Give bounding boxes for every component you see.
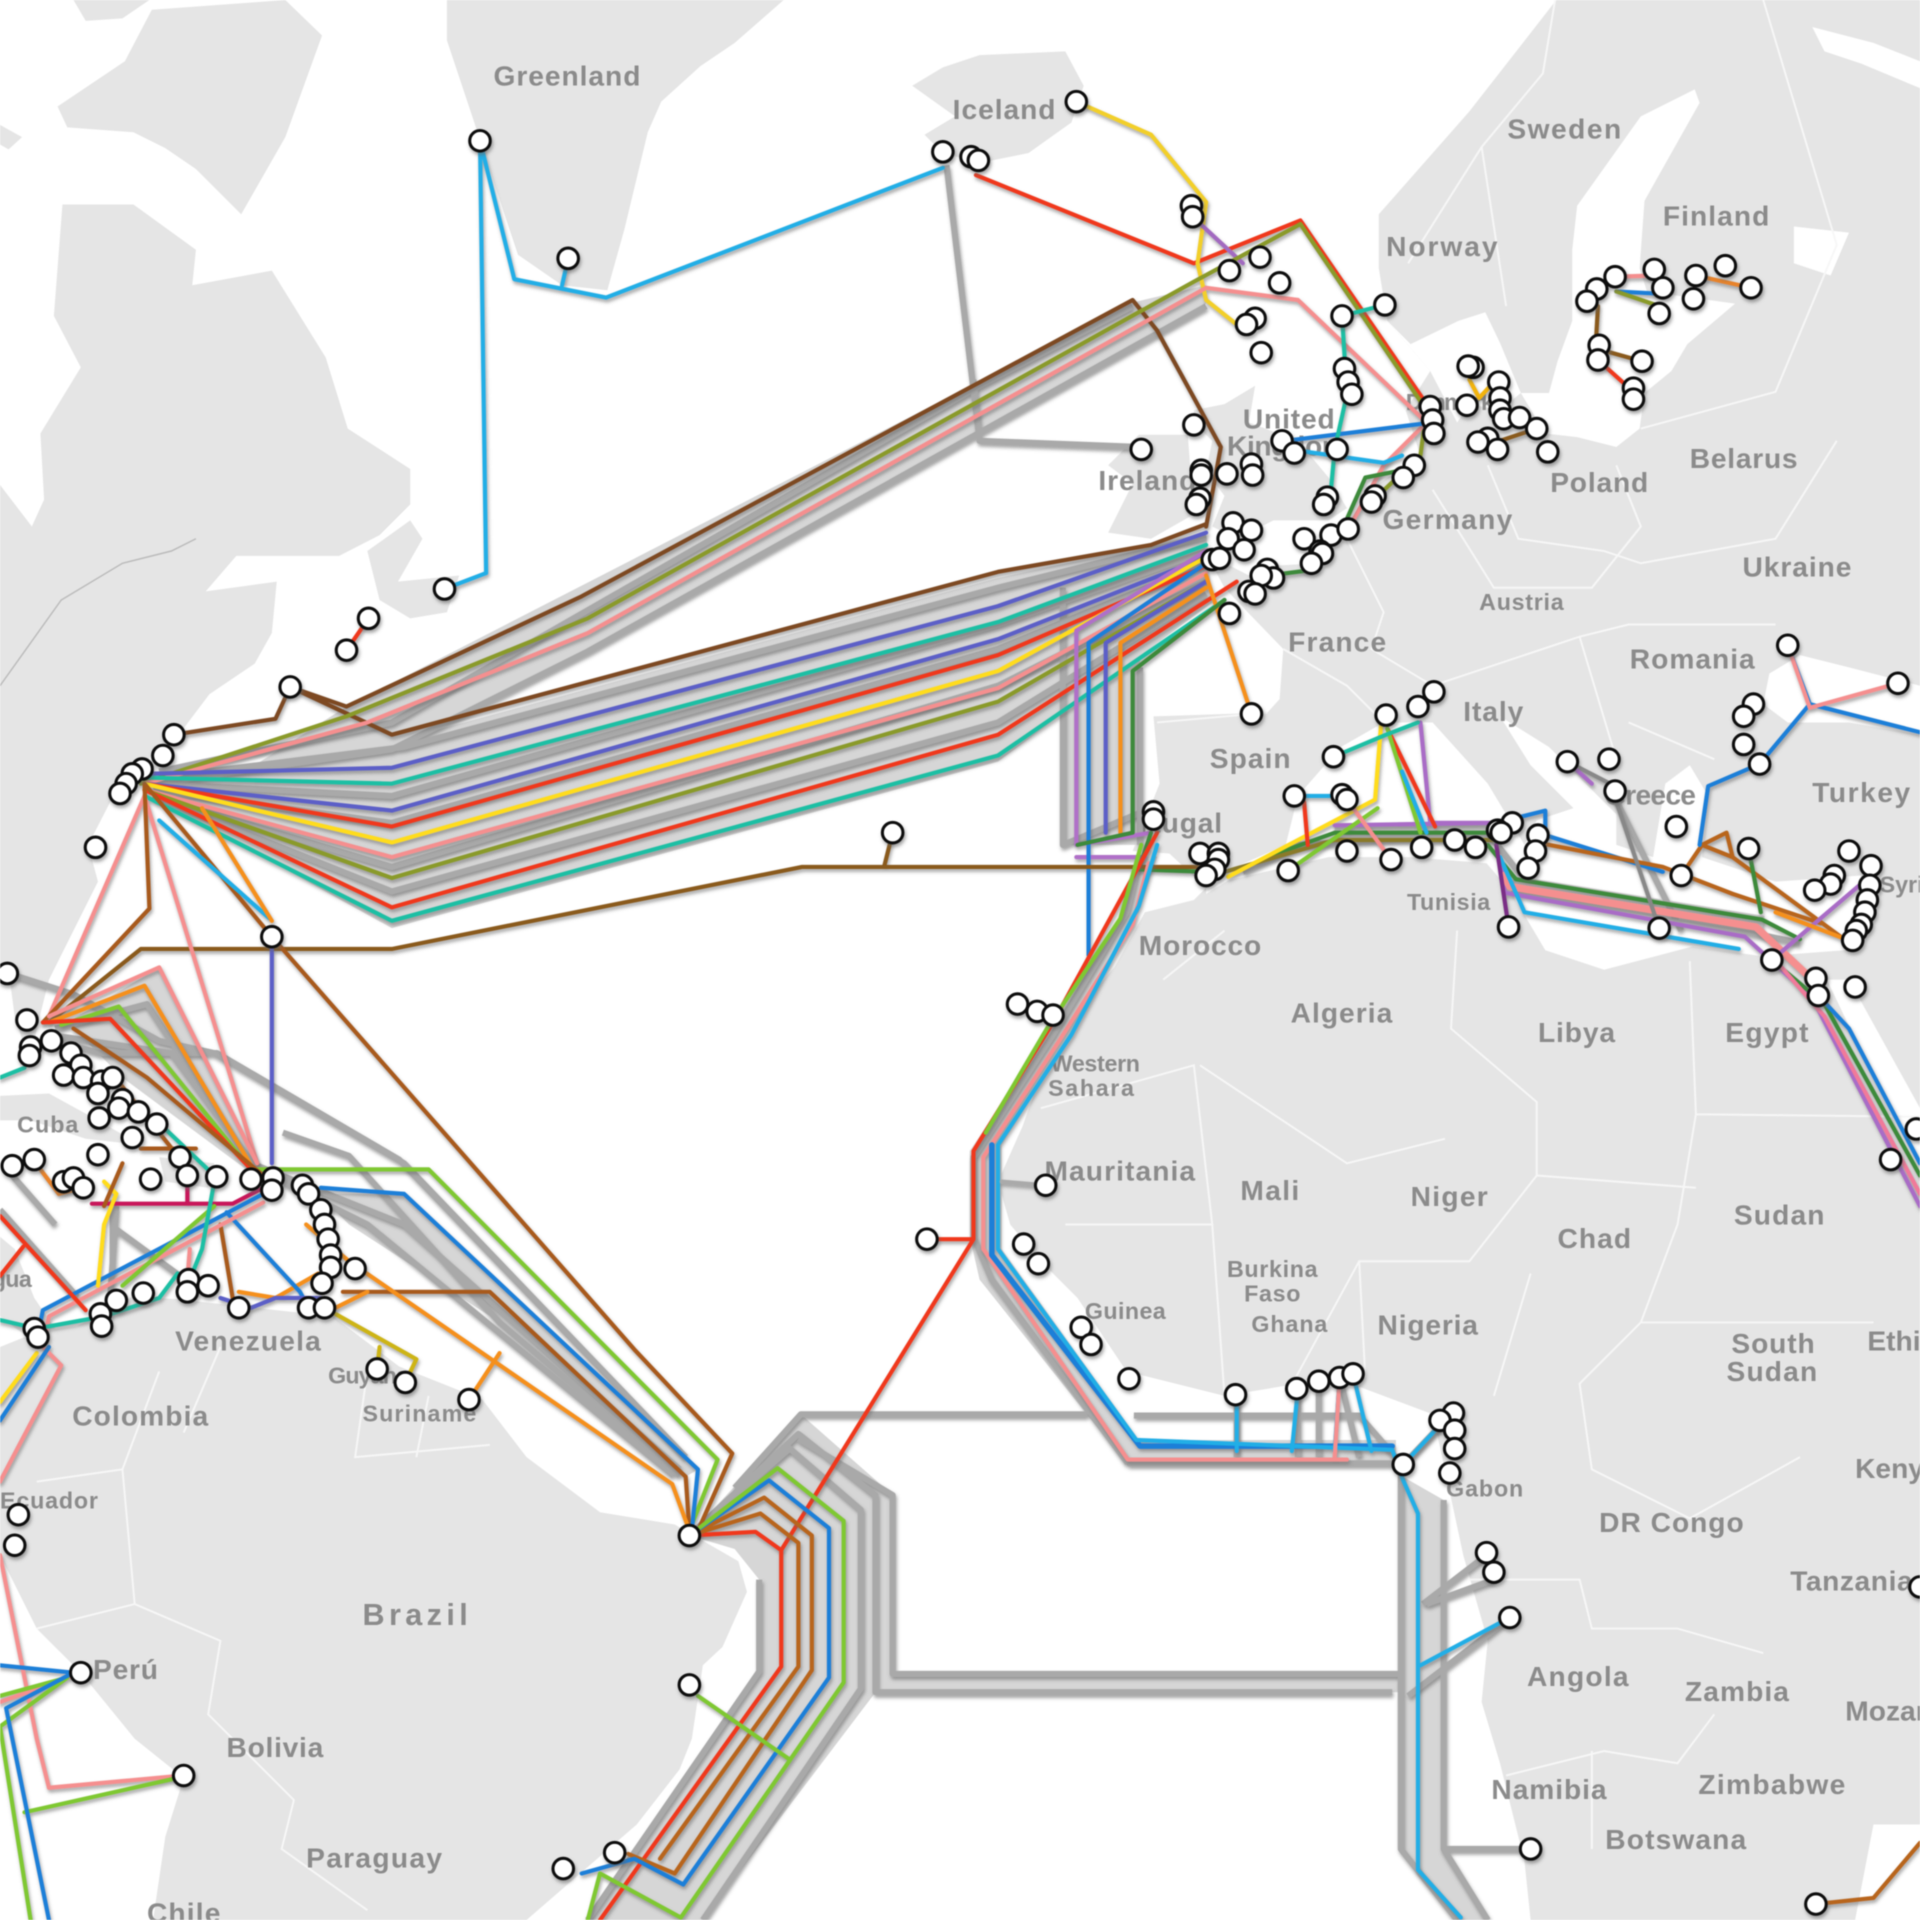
label: Germany: Germany xyxy=(1382,504,1513,535)
cable: pink trunk xyxy=(1504,876,1812,980)
label: Austria: Austria xyxy=(1479,589,1565,615)
label: Iceland: Iceland xyxy=(953,94,1056,125)
land: Hispaniola xyxy=(159,1157,214,1188)
label: Niger: Niger xyxy=(1411,1181,1488,1212)
label: Venezuela: Venezuela xyxy=(175,1326,321,1357)
label: Zimbabwe: Zimbabwe xyxy=(1698,1769,1845,1800)
label: Nigeria: Nigeria xyxy=(1378,1310,1478,1341)
cable: brown diagonal xyxy=(43,784,732,1531)
label: Denmark: Denmark xyxy=(1406,389,1494,415)
cable: pink Ghana xyxy=(1335,1378,1340,1457)
shading: South Atlantic link xyxy=(876,1674,1400,1692)
cable: Pacific pink xyxy=(0,1555,184,1788)
cable: Pacific blue xyxy=(0,1665,73,1920)
sea: lake Ladoga xyxy=(1794,227,1849,276)
cables: Caribbean xyxy=(0,967,718,1531)
cable: yellow Caribbean xyxy=(0,1182,116,1402)
cable: gray stub Mauritania xyxy=(1002,1182,1046,1185)
cable: channel xyxy=(1267,569,1316,576)
cable: Faroe yellow xyxy=(1076,102,1237,324)
label: Kingdom: Kingdom xyxy=(1227,431,1347,462)
cable: pink Algeria xyxy=(1347,800,1391,860)
label: Morocco: Morocco xyxy=(1139,930,1261,961)
cable: cyan trunk xyxy=(1500,857,1739,949)
cable: cyan branches xyxy=(1237,1374,1510,1665)
sea: Skagerrak xyxy=(1387,312,1521,422)
label: Angola: Angola xyxy=(1527,1661,1629,1692)
cable: cyan Italy xyxy=(1294,771,1427,833)
label: Namibia: Namibia xyxy=(1491,1774,1607,1805)
landing points: Caribbean xyxy=(0,963,365,1347)
label: Gabon: Gabon xyxy=(1446,1475,1523,1501)
label: Romania: Romania xyxy=(1630,644,1755,675)
label: Egypt: Egypt xyxy=(1725,1017,1809,1048)
cable: orange to Bermuda xyxy=(202,808,272,921)
label: Burkina: Burkina xyxy=(1227,1256,1319,1282)
label: Italy: Italy xyxy=(1463,696,1524,727)
cable: pink north xyxy=(144,288,1427,784)
landing points: Northern Europe xyxy=(1181,195,1761,462)
cable: yellow xyxy=(144,557,1206,842)
cable: green North Sea xyxy=(1341,471,1396,533)
cable: gray Greece xyxy=(1567,762,1659,928)
land: Canada and eastern USA xyxy=(0,204,410,1065)
cable: Bermuda slate xyxy=(270,943,274,1163)
shading: Caribbean fan xyxy=(67,967,260,1173)
cable: olive 2 xyxy=(144,582,1206,878)
land: Cuba xyxy=(0,1093,141,1145)
cable: Iceland-Scotland xyxy=(347,175,1427,650)
land: South America xyxy=(0,1297,747,1920)
cable: red xyxy=(144,566,1206,827)
cable: orange Finland xyxy=(1696,276,1751,288)
cable: red 2 xyxy=(144,582,1237,907)
label: Brazil: Brazil xyxy=(362,1598,468,1632)
cable: green Italy xyxy=(1288,729,1420,871)
label: Guinea: Guinea xyxy=(1085,1298,1167,1324)
cable: North Sea cyan xyxy=(1298,451,1402,463)
shading: Southwest Africa bundle xyxy=(1401,1476,1488,1920)
label: Ecuador: Ecuador xyxy=(0,1488,98,1514)
cable: red West Africa xyxy=(781,833,1157,1550)
label: Belarus: Belarus xyxy=(1690,443,1798,474)
cable: Azores brown xyxy=(49,833,1206,1022)
cable: pink West Africa xyxy=(983,863,1347,1460)
cable: blue Sicily-Greece xyxy=(1496,811,1663,872)
label: Suriname: Suriname xyxy=(362,1401,476,1427)
shading: Caribbean to Brazil bundle xyxy=(318,1194,698,1477)
shading: North Atlantic upper bundle xyxy=(245,285,1206,771)
land: Europe, Africa, Asia xyxy=(998,0,1920,1920)
label: Spain: Spain xyxy=(1210,743,1291,774)
cable: slate vertical xyxy=(1106,582,1206,833)
cables: West Africa xyxy=(781,833,1510,1918)
cable: orange fan xyxy=(49,986,253,1169)
label: Sudan (South): Sudan xyxy=(1727,1356,1817,1387)
cables: South America xyxy=(0,1468,1920,1920)
landing points: UK, Ireland, Benelux, France xyxy=(1131,415,1425,724)
land: Ireland xyxy=(1108,435,1194,539)
cable: brown Brazil coast 2 xyxy=(628,1498,812,1873)
cable: red fan xyxy=(43,1019,251,1169)
cable: pink Black Sea xyxy=(1788,645,1898,708)
sea: Red Sea xyxy=(1827,980,1920,1176)
land: Greenland xyxy=(447,0,784,290)
landing points: West and South Africa xyxy=(917,994,1920,1914)
cable: cyan west coast xyxy=(0,1347,49,1420)
label: Mauritania: Mauritania xyxy=(1044,1155,1195,1186)
cable: orange Levant xyxy=(1776,912,1849,940)
label: Zambia: Zambia xyxy=(1685,1676,1789,1707)
land: Iceland xyxy=(912,51,1084,163)
cable: green vertical xyxy=(1078,600,1224,872)
cable: pink fan xyxy=(49,967,257,1163)
cable: pink xyxy=(144,573,1206,857)
label: Perú: Perú xyxy=(93,1654,158,1685)
label: Greece: Greece xyxy=(1604,779,1696,810)
label: France: France xyxy=(1288,626,1386,657)
label: Norway: Norway xyxy=(1386,231,1498,262)
cable: gold Guyana xyxy=(324,1308,416,1382)
landing points: Mediterranean xyxy=(1143,635,1920,1170)
shading: North Atlantic main bundle xyxy=(153,533,1212,928)
shading: Portugal vertical bundle xyxy=(1063,624,1140,845)
label: Poland: Poland xyxy=(1550,467,1648,498)
cable: slate blue xyxy=(144,533,1206,774)
label: Western: Western xyxy=(1051,1050,1140,1076)
cable: teal Corsica xyxy=(1333,722,1418,757)
land: Great Britain xyxy=(1194,386,1347,539)
cable: green West Africa xyxy=(986,845,1141,1133)
cable: brown fan xyxy=(73,1029,689,1531)
cable: Red Sea green xyxy=(1772,960,1920,1176)
cable: olive Finland xyxy=(1616,291,1659,306)
label: Botswana: Botswana xyxy=(1605,1824,1746,1855)
cable: purple trunk xyxy=(1335,722,1920,1206)
cable: teal xyxy=(144,545,1206,784)
cables: Mediterranean xyxy=(1224,645,1920,1206)
cable: yellow Baltic xyxy=(1469,380,1494,398)
label: Turkey: Turkey xyxy=(1812,777,1911,808)
sea: Black Sea xyxy=(1763,655,1920,735)
land: Arctic islands xyxy=(58,0,322,214)
label: Ireland: Ireland xyxy=(1098,465,1196,496)
label: South: South xyxy=(1731,1328,1815,1359)
cable: top brown xyxy=(174,300,1221,735)
cable: blue Brazil coast xyxy=(582,1480,829,1884)
label: Colombia: Colombia xyxy=(72,1400,208,1431)
cable: green fan xyxy=(61,1007,718,1531)
cable: Mozambique channel xyxy=(1816,1843,1920,1904)
land: small arctic island xyxy=(73,0,149,21)
cable: slate Venezuela xyxy=(220,1298,321,1308)
label: Tunisia: Tunisia xyxy=(1407,889,1491,915)
cable bundle shading xyxy=(67,285,1488,1920)
cable: Red Sea pink xyxy=(1782,967,1920,1194)
cable: blue West Africa xyxy=(992,1145,1392,1446)
landing points: Atlantic and North America xyxy=(85,91,1087,947)
label: Finland: Finland xyxy=(1663,200,1769,231)
cable: green Salvador branch xyxy=(698,1696,790,1760)
cable: brown Black Sea xyxy=(1681,833,1849,943)
cable: pink long xyxy=(0,1202,263,1482)
cable: red Baltic xyxy=(1598,360,1633,392)
shading: Brazil coast bundle xyxy=(588,1414,893,1920)
label: Sahara: Sahara xyxy=(1048,1075,1135,1101)
cable: orange Cuba xyxy=(40,1169,73,1194)
cable: purple Greece xyxy=(1567,762,1592,784)
cable: brown Colombia xyxy=(104,1149,196,1206)
cable: Faroe purple xyxy=(1194,218,1243,263)
cable: brown Sicily-Greece xyxy=(1537,842,1821,923)
label: Sweden: Sweden xyxy=(1507,113,1621,144)
landing points: South America xyxy=(4,1359,700,1879)
cable: orange vertical xyxy=(1120,576,1251,833)
cable: teal Scotland-Norway xyxy=(1330,305,1385,502)
cable: magenta link xyxy=(92,1176,263,1204)
cable: teal xyxy=(0,1068,214,1329)
label: Bolivia: Bolivia xyxy=(227,1732,324,1763)
cable: brown Brazil coast 1 xyxy=(660,1513,798,1859)
label: Sudan: Sudan xyxy=(1734,1199,1824,1230)
cable: green trunk xyxy=(1488,845,1800,939)
cable: Red Sea blue xyxy=(1818,996,1920,1163)
label: Faso: Faso xyxy=(1244,1281,1300,1307)
cable: purple Levant xyxy=(1772,882,1864,960)
cable: brown Baltic xyxy=(1500,306,1642,441)
cable: green Levant xyxy=(1749,849,1761,912)
cable: blue Finland xyxy=(1616,291,1663,294)
label: Ukraine: Ukraine xyxy=(1742,552,1851,583)
cable: red Brazil coast xyxy=(600,1532,781,1920)
label: Algeria: Algeria xyxy=(1291,997,1393,1028)
cable: green Brazil coast xyxy=(588,1468,844,1920)
cable: green west trunk xyxy=(1273,833,1493,855)
cable: olive xyxy=(141,224,1427,784)
label: DR Congo: DR Congo xyxy=(1599,1507,1744,1538)
cable: red Central America xyxy=(0,1216,86,1310)
cable: dark purple Tunis xyxy=(1496,845,1509,927)
label: Ghana: Ghana xyxy=(1251,1311,1328,1337)
label: Guyana: Guyana xyxy=(328,1363,410,1389)
cable: cyan West Africa xyxy=(998,845,1461,1918)
cable: orange Suriname xyxy=(469,1353,500,1400)
sea: Baltic xyxy=(1521,89,1735,447)
label: Tanzania: Tanzania xyxy=(1790,1566,1913,1597)
cable: yellow Italy xyxy=(1228,722,1381,877)
label: Chad: Chad xyxy=(1558,1223,1631,1254)
label: Paraguay: Paraguay xyxy=(306,1842,442,1873)
label: Cuba: Cuba xyxy=(17,1112,79,1138)
cable: orange to Brazil xyxy=(239,1224,689,1531)
cable: red Italy xyxy=(1304,729,1435,845)
cable: cyan/orange to Bermuda xyxy=(159,820,269,918)
cable: teal 2 xyxy=(144,600,1224,921)
cable: USA-Caribbean pink xyxy=(49,796,257,1163)
label: Portugal: Portugal xyxy=(1102,808,1222,839)
cables: North Atlantic xyxy=(43,102,1427,1531)
label: United: United xyxy=(1243,404,1335,435)
sea: Mediterranean xyxy=(1206,716,1861,970)
sea: White Sea xyxy=(1812,27,1920,88)
land: Newfoundland xyxy=(367,520,459,618)
cable: slate blue 2 xyxy=(144,557,1206,811)
cable: blue vertical xyxy=(1089,563,1206,955)
cable: Portugal verticals xyxy=(1076,551,1206,857)
cable: North Sea blue xyxy=(1286,422,1433,441)
cable: Pacific green xyxy=(0,1678,178,1920)
label: Greenland: Greenland xyxy=(493,61,640,92)
land: arctic islet xyxy=(0,125,22,149)
cable: green long xyxy=(122,1206,214,1286)
cable: blue Bosphorus xyxy=(1700,645,1920,845)
land: Central America xyxy=(0,1237,55,1335)
sea overlays xyxy=(1206,27,1920,1176)
cable: Greenland-Iceland xyxy=(444,141,943,589)
label: Mali: Mali xyxy=(1240,1175,1299,1206)
cable: olive west trunk xyxy=(1224,840,1493,872)
cable: blue to Brazil xyxy=(321,1188,698,1531)
shading: West Africa coastal bundle xyxy=(970,845,1396,1466)
cables: Northern Europe xyxy=(1267,276,1751,576)
cable: pink Finland xyxy=(1615,276,1654,277)
label: Libya: Libya xyxy=(1538,1017,1615,1048)
cable: blue long xyxy=(37,1194,309,1341)
